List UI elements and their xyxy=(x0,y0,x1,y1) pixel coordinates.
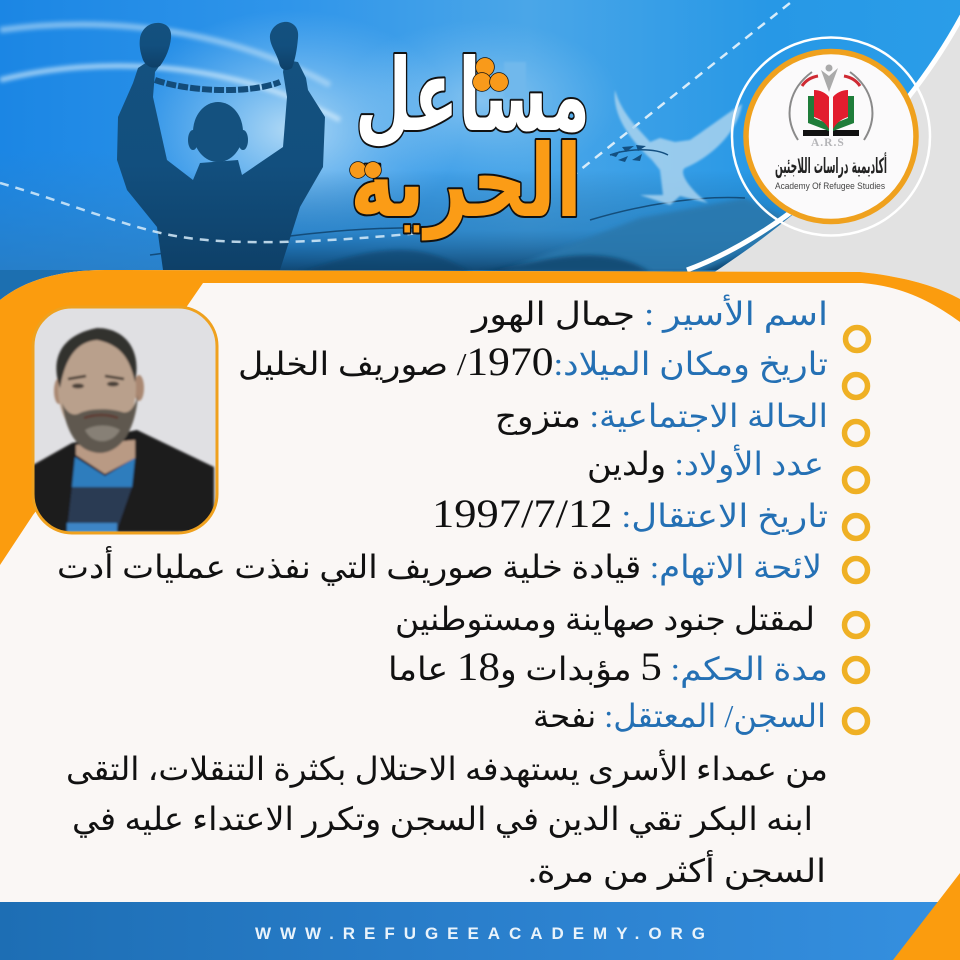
prisoner name: اسم الأسير : جمال الهور xyxy=(470,294,828,333)
birth date and place: تاريخ ومكان الميلاد:1970/ صوريف الخليل xyxy=(238,339,828,384)
handcuff chain xyxy=(155,80,280,90)
paragraph line two: ابنه البكر تقي الدين في السجن وتكرر الاعتداء عليه في xyxy=(72,801,813,838)
paragraph line one: من عمداء الأسرى يستهدفه الاحتلال بكثرة التنقلات، التقى xyxy=(66,749,828,788)
children: عدد الأولاد: ولدين xyxy=(587,444,824,483)
charges line two: لمقتل جنود صهاينة ومستوطنين xyxy=(395,601,815,638)
eyes and brows xyxy=(68,376,124,379)
title: مشاعل الحرية xyxy=(350,37,590,241)
dashed flight line xyxy=(0,183,430,242)
website address: WWW.REFUGEEACADEMY.ORG xyxy=(255,924,705,943)
jacket xyxy=(33,430,214,532)
head xyxy=(193,102,243,162)
charges line one: لائحة الاتهام: قيادة خلية صوريف التي نفذت عمليات أدت xyxy=(57,546,822,586)
prisoner photo xyxy=(33,307,217,533)
footer bar xyxy=(0,873,960,960)
silhouette: chained prisoner xyxy=(117,22,325,270)
logo english name: Academy Of Refugee Studies xyxy=(775,181,885,192)
logo arcs xyxy=(790,72,872,140)
content sheet xyxy=(0,270,960,960)
chain-link fence xyxy=(500,198,800,272)
paragraph line three: السجن أكثر من مرة. xyxy=(528,850,826,890)
title word two: الحرية xyxy=(350,123,582,241)
marital status: الحالة الاجتماعية: متزوج xyxy=(495,398,828,435)
logo book xyxy=(803,90,859,136)
sky patch behind repositioned dots xyxy=(504,62,526,98)
footer orange triangle xyxy=(893,873,960,960)
face xyxy=(58,338,136,419)
biography paragraph xyxy=(66,749,828,890)
header banner xyxy=(0,0,960,305)
logo xyxy=(732,38,930,236)
orange top band xyxy=(0,270,960,565)
shirt xyxy=(72,457,135,487)
ears xyxy=(52,378,61,405)
grey corner with white arc xyxy=(660,16,960,305)
raised fists xyxy=(140,23,171,68)
biography facts xyxy=(57,294,828,735)
mouth xyxy=(84,415,118,418)
bullet markers xyxy=(844,328,868,732)
arrest date: تاريخ الاعتقال: 1997/7/12 xyxy=(432,491,828,536)
neck xyxy=(76,440,135,474)
hair xyxy=(56,328,137,388)
prison: السجن/ المعتقل: نفحة xyxy=(533,698,826,735)
beard xyxy=(62,395,138,453)
icon: dove with olive branch xyxy=(610,90,742,205)
orange dots on title xyxy=(350,58,508,178)
title word one: مشاعل xyxy=(355,37,590,154)
barbed wire xyxy=(150,197,745,255)
logo initials: A.R.S xyxy=(811,137,845,149)
sentence: مدة الحكم: 5 مؤبدات و18 عاما xyxy=(388,644,828,689)
